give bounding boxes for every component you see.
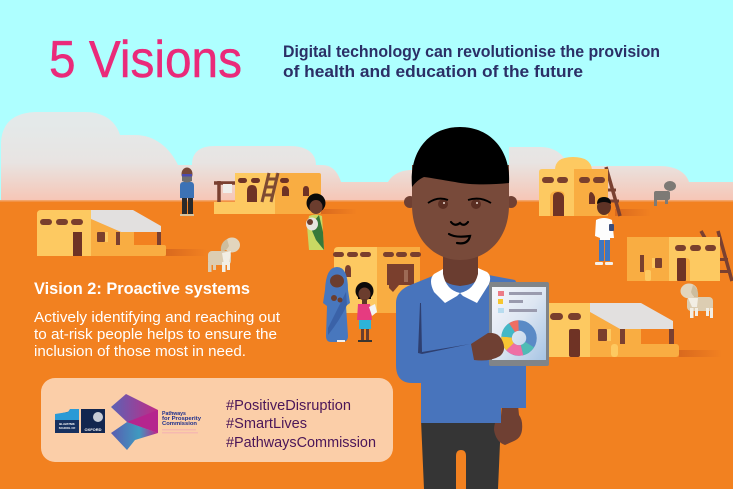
hair (412, 127, 509, 187)
panel: logos and hashtags (41, 378, 393, 462)
tablet (489, 282, 549, 366)
clouds on horizon (1, 112, 733, 201)
logo: Pathways for Prosperity Commission: for Prosperity (162, 416, 201, 422)
hashtags: #PositiveDisruption (226, 398, 351, 414)
person: girl with phone (356, 282, 377, 342)
title: 5 Visions (49, 31, 242, 89)
logo: Pathways for Prosperity Commission: Pathways (162, 411, 186, 417)
nose and mouth (449, 222, 470, 243)
house: middle behind main figure (333, 247, 421, 313)
face (412, 165, 509, 260)
subtitle (283, 42, 660, 81)
vision description (34, 310, 280, 360)
logo: Blavatnik School of Government: SCHOOL OF (59, 426, 76, 430)
person: man with beard in blue (180, 168, 194, 216)
house: back village with ladder (214, 173, 357, 214)
vision description: to at-risk people helps to ensure the (34, 327, 277, 343)
subtitle: of health and education of the future (283, 62, 583, 81)
ears (404, 196, 416, 208)
house: left with grey roof (37, 210, 207, 256)
neck (443, 250, 478, 286)
wrist and lower hand (494, 405, 522, 445)
hashtags: #SmartLives (226, 416, 307, 432)
donut chart (506, 326, 532, 350)
pointing fist (471, 333, 504, 360)
vision heading: Vision 2: Proactive systems (34, 280, 250, 298)
logo: University of Oxford: OXFORD (84, 427, 102, 432)
arm crease (418, 303, 470, 354)
trousers (421, 420, 501, 489)
hashtags (226, 398, 376, 451)
house: front right with grey roof (546, 303, 722, 357)
goat: grey distant (654, 181, 676, 206)
logo: Pathways for Prosperity Commission (111, 394, 201, 450)
collar (431, 268, 490, 303)
vision description: inclusion of those most in need. (34, 344, 246, 360)
main figure: man with tablet (396, 127, 549, 489)
vision description: Actively identifying and reaching out (34, 310, 280, 326)
goat: left (208, 238, 240, 272)
subtitle: Digital technology can revolutionise the provision (283, 42, 660, 61)
person: man in white shirt (595, 197, 614, 265)
orange ground (0, 200, 733, 489)
logo: Blavatnik School of Government (55, 409, 79, 433)
eyes and brows (428, 199, 491, 209)
sweater (396, 273, 526, 423)
hashtags: #PathwaysCommission (226, 435, 376, 451)
logo: Blavatnik School of Government: BLAVATNIK (59, 422, 75, 426)
person: woman in blue hijab (323, 267, 350, 342)
goat: right (680, 284, 713, 318)
logo: Pathways for Prosperity Commission: Commission (162, 421, 197, 427)
logo: University of Oxford (81, 409, 105, 433)
house: right with ladder (627, 231, 732, 281)
person: woman in green with baby (306, 194, 326, 250)
house: top right with dome and ladder (539, 157, 651, 216)
